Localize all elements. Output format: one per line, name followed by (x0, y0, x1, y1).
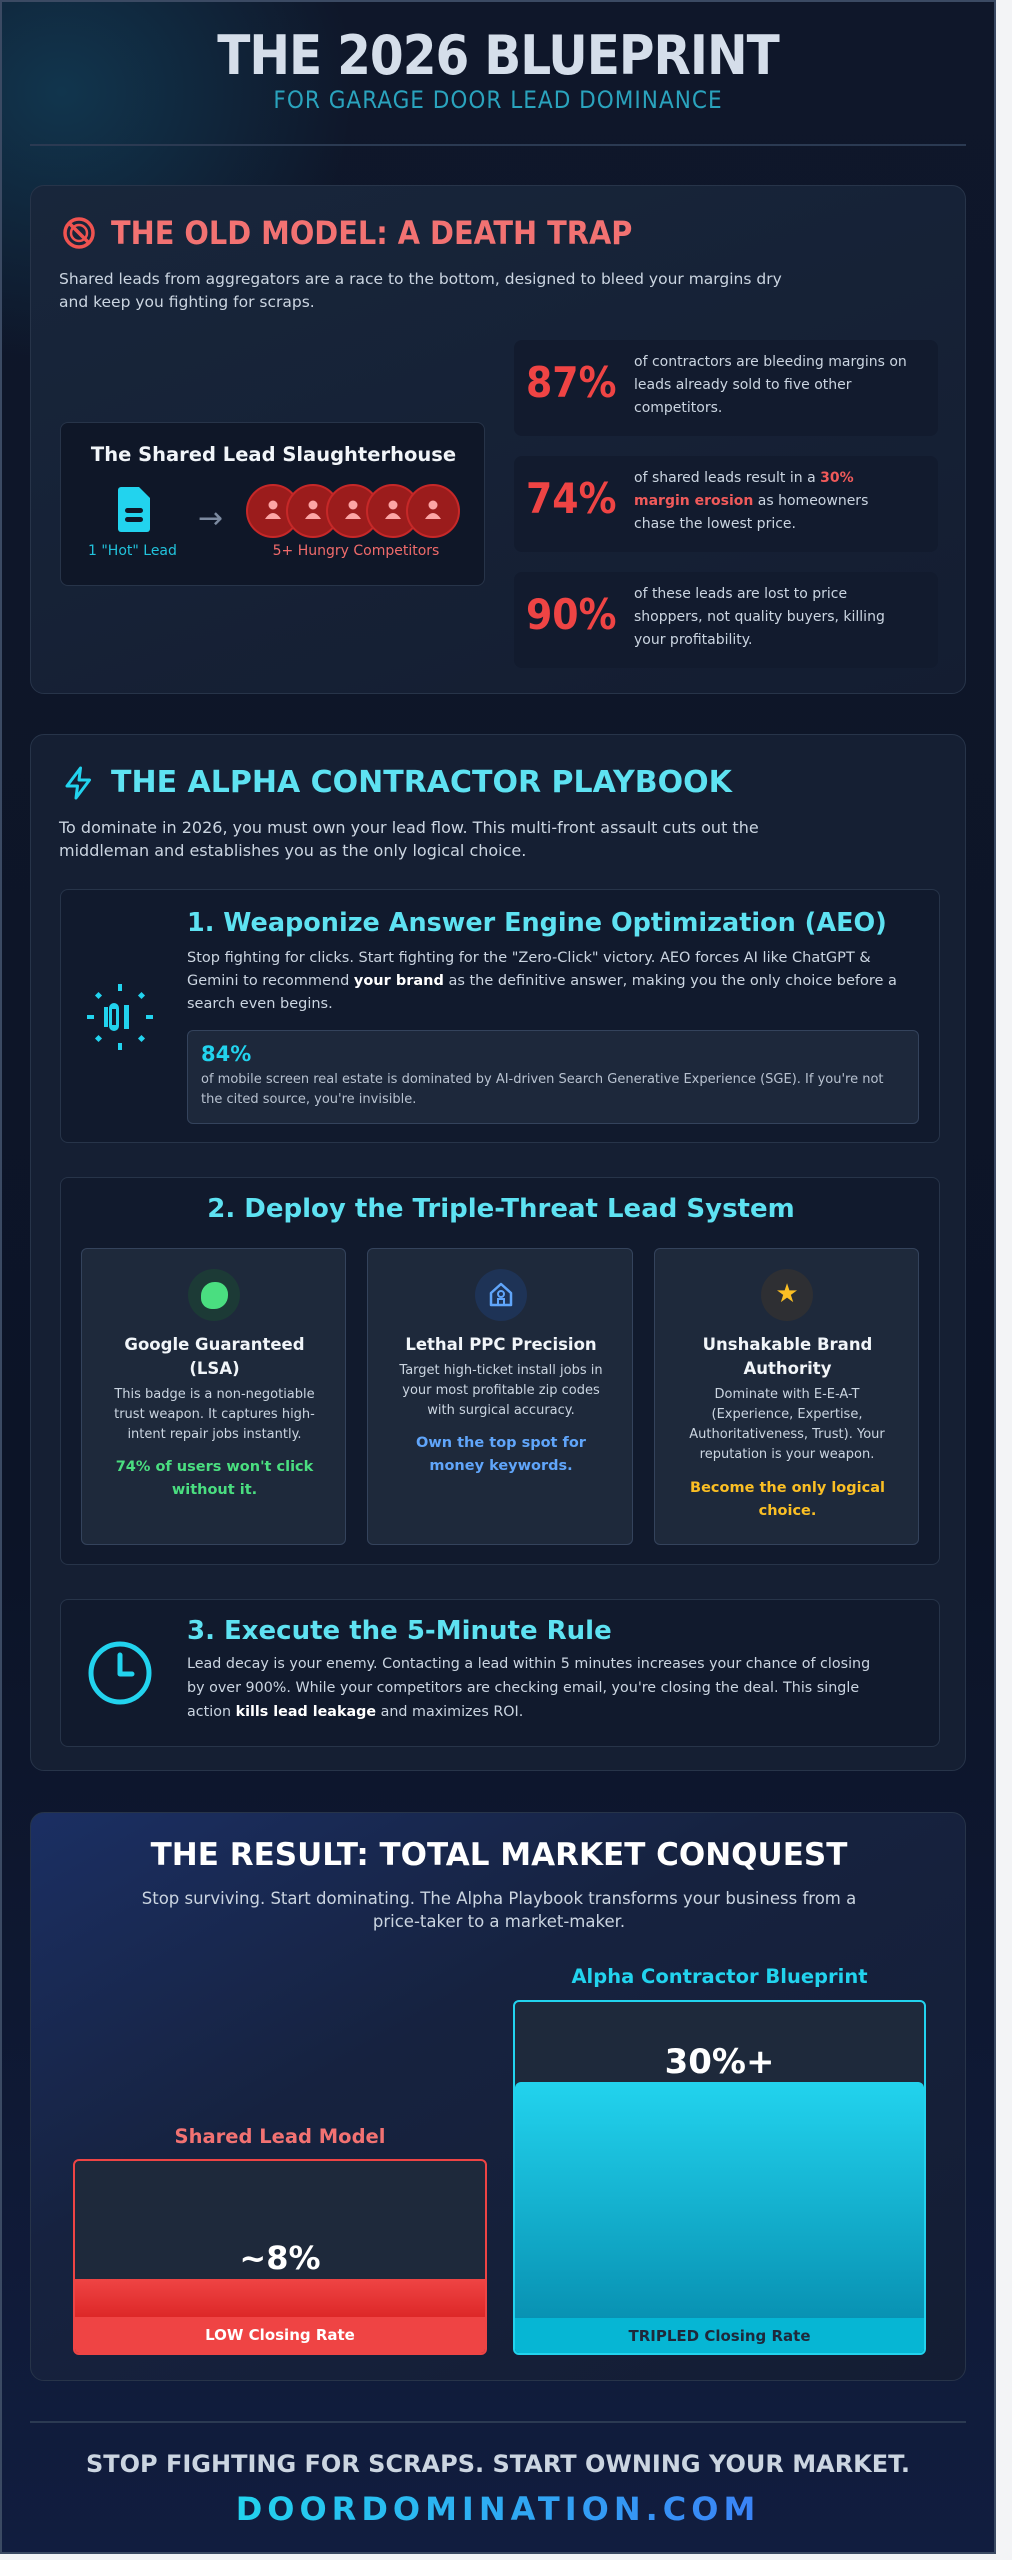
stat box 84: 84% (201, 1042, 251, 1066)
footer url: DOORDOMINATION.COM (236, 2490, 760, 2528)
subtitle: FOR GARAGE DOOR LEAD DOMINANCE (273, 86, 723, 114)
subcard PPC: Target high-ticket install jobs in your most profitable zip codes with surgical accuracy. (399, 1363, 603, 1418)
stat 90: 90% (526, 590, 616, 639)
card: 5 minute rule (60, 1599, 940, 1747)
icon: AI (87, 984, 153, 1050)
stat 90: of these leads are lost to price shoppers, not quality buyers, killing your profitability. (634, 586, 885, 648)
subcard brand: Unshakable Brand Authority (703, 1335, 872, 1378)
panel: old model (30, 185, 966, 694)
stat box 84: of mobile screen real estate is dominated by AI-driven Search Generative Experience (SGE). If you're not the cited source, you're invisible. (201, 1072, 884, 1107)
icon: clock (88, 1642, 152, 1704)
icon: document (118, 487, 150, 532)
stat 74 (514, 456, 938, 552)
subcard LSA (81, 1248, 346, 1545)
bar: shared lead: LOW Closing Rate (205, 2326, 355, 2344)
bar: shared lead: Shared Lead Model (175, 2125, 385, 2148)
subcard PPC (367, 1248, 633, 1545)
slaughterhouse diagram: The Shared Lead Slaughterhouse (91, 443, 456, 466)
icon: star (761, 1269, 813, 1321)
heading: THE RESULT: TOTAL MARKET CONQUEST (151, 1837, 847, 1873)
body: Lead decay is your enemy. Contacting a lead within 5 minutes increases your chance of closing by over 900%. While your competitors are checking email, you're closing the deal. This single action kills lead leakage and maximizes ROI. (187, 1656, 870, 1720)
bar: alpha: 30%+ (665, 2042, 774, 2082)
title: 2. Deploy the Triple-Threat Lead System (207, 1194, 795, 1224)
bar: shared lead (73, 2125, 487, 2355)
intro: To dominate in 2026, you must own your lead flow. This multi-front assault cuts out the middleman and establishes you as the only logical choice. (59, 818, 759, 860)
subcard brand: Dominate with E-E-A-T (Experience, Expertise, Authoritativeness, Trust). Your reputation is your weapon. (689, 1387, 885, 1462)
icon: shield (188, 1269, 240, 1321)
card: triple threat (60, 1177, 940, 1565)
intro text: Shared leads from aggregators are a race to the bottom, designed to bleed your margins dry and keep you fighting for scraps. (59, 270, 782, 311)
subcard brand: Become the only logical choice. (690, 1480, 885, 1519)
title: THE 2026 BLUEPRINT (217, 24, 779, 87)
heading: THE OLD MODEL: A DEATH TRAP (111, 214, 632, 252)
icon: bolt (65, 766, 92, 800)
icon: star: ★ (775, 1279, 799, 1309)
icon: house (475, 1269, 527, 1321)
stat 87: 87% (526, 358, 616, 407)
stat 87 (514, 340, 938, 436)
stat 74: 74% (526, 474, 616, 523)
bar: alpha: TRIPLED Closing Rate (628, 2327, 810, 2345)
competitors (246, 484, 460, 538)
subcard PPC: Own the top spot for money keywords. (416, 1435, 586, 1474)
bar: alpha: Alpha Contractor Blueprint (571, 1965, 868, 1988)
slaughterhouse diagram: 1 "Hot" Lead (88, 543, 177, 559)
slaughterhouse diagram (60, 422, 485, 586)
stat 90 (514, 572, 938, 668)
bar: shared lead: ~8% (239, 2239, 321, 2277)
subcard brand (654, 1248, 919, 1545)
arrow: → (198, 501, 223, 536)
stat 87: of contractors are bleeding margins on leads already sold to five other competitors. (634, 354, 907, 416)
subtext: Stop surviving. Start dominating. The Alpha Playbook transforms your business from a price-taker to a market-maker. (142, 1889, 856, 1931)
stat box 84 (187, 1030, 919, 1124)
subcard PPC: Lethal PPC Precision (405, 1335, 597, 1354)
subcard LSA: Google Guaranteed (LSA) (124, 1335, 305, 1378)
card: AEO (60, 889, 940, 1143)
body: Stop fighting for clicks. Start fighting for the "Zero-Click" victory. AEO forces AI like ChatGPT & Gemini to recommend your brand as the definitive answer, making you the only choice before a search even begins. (187, 950, 897, 1012)
subcard LSA: This badge is a non-negotiable trust weapon. It captures high-intent repair jobs instantly. (114, 1387, 315, 1442)
bar: alpha (513, 1965, 926, 2355)
heading: THE ALPHA CONTRACTOR PLAYBOOK (111, 765, 732, 800)
stat 74: of shared leads result in a 30% margin erosion as homeowners chase the lowest price. (634, 470, 868, 532)
icon: prohibited (63, 217, 95, 249)
slaughterhouse diagram: 5+ Hungry Competitors (273, 543, 439, 559)
panel: alpha playbook (30, 734, 966, 1771)
title: 1. Weaponize Answer Engine Optimization (AEO) (187, 908, 887, 938)
panel: result (30, 1812, 966, 2381)
title: 3. Execute the 5-Minute Rule (187, 1616, 612, 1646)
subcard LSA: 74% of users won't click without it. (116, 1459, 313, 1498)
footer tagline: STOP FIGHTING FOR SCRAPS. START OWNING YOUR MARKET. (86, 2450, 910, 2478)
